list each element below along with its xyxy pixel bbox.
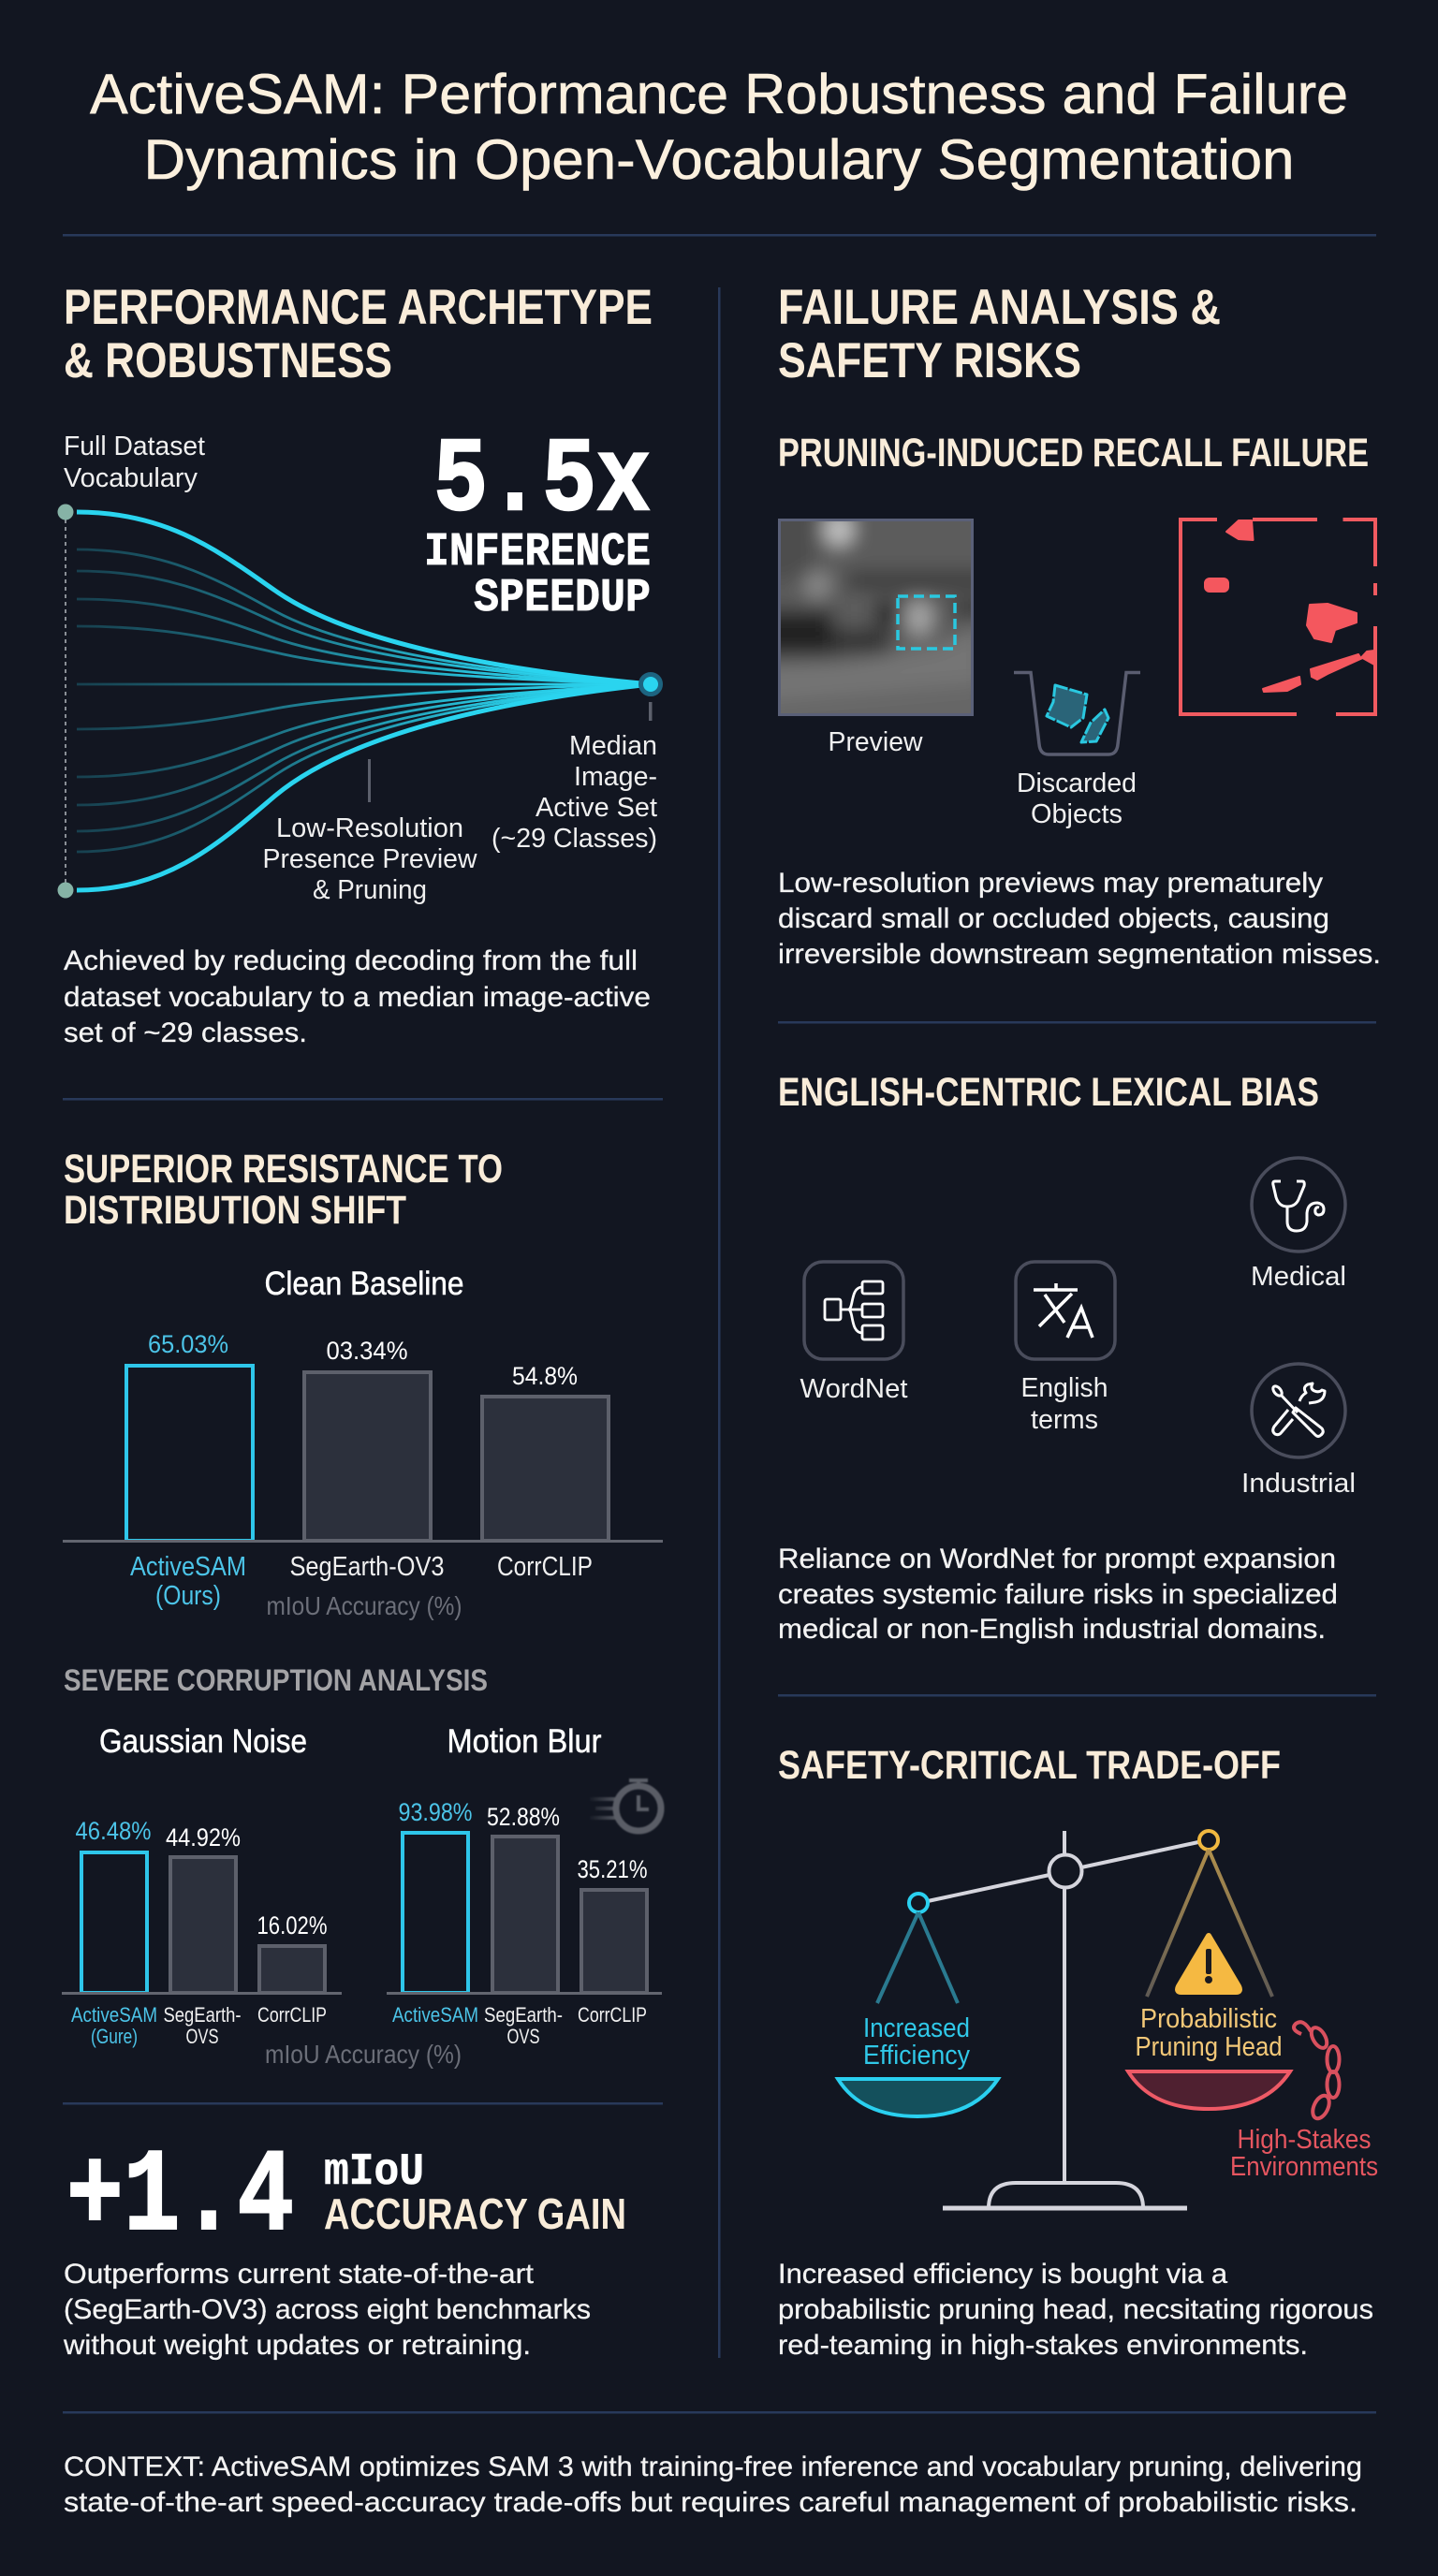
panel: failure analysis and safety risks	[749, 280, 1381, 2361]
label: discarded objects	[1017, 768, 1137, 829]
label: english terms	[1020, 1373, 1108, 1435]
text: speedup explanation: dataset vocabulary to a median image-active	[64, 982, 651, 1013]
footer: context: state-of-the-art speed-accuracy trade-offs but requires careful management of probabilistic risks.	[64, 2487, 1357, 2518]
icon: tools	[1252, 1364, 1345, 1457]
label: low-resolution presence preview: & Pruning	[313, 875, 427, 905]
text: wordnet risk explanation	[778, 1544, 1338, 1645]
diagram: balance scale	[838, 1831, 1290, 2208]
text: trade-off explanation: probabilistic pruning head, necsitating rigorous	[778, 2294, 1373, 2325]
bar chart: motion blur: SegEarth-	[484, 2003, 563, 2027]
heading: severe corruption analysis: SEVERE CORRUPTION ANALYSIS	[64, 1663, 488, 1697]
bar chart: clean baseline: (Ours)	[155, 1581, 221, 1611]
funnel chart: vocabulary reduction	[58, 504, 661, 899]
title: Dynamics in Open-Vocabulary Segmentation	[144, 128, 1294, 191]
label: preview: Preview	[828, 727, 924, 757]
label: full dataset vocabulary: Full Dataset	[64, 432, 205, 461]
label: wordnet: WordNet	[800, 1374, 908, 1404]
heading: performance archetype: & ROBUSTNESS	[64, 333, 392, 388]
label: probabilistic pruning head	[1135, 2004, 1283, 2062]
bar chart: clean baseline: 03.34%	[326, 1337, 408, 1365]
label: english terms: English	[1020, 1373, 1108, 1403]
label: high-stakes environments: Environments	[1230, 2152, 1378, 2182]
icon: wordnet tree	[804, 1262, 903, 1359]
text: preview failure explanation: Low-resolution previews may prematurely	[778, 868, 1323, 899]
bar chart: gaussian noise: (Gure)	[91, 2025, 138, 2048]
label: median image-active set	[492, 731, 657, 854]
stat: +1.4 mIoU accuracy gain: ACCURACY GAIN	[324, 2189, 626, 2238]
heading: superior resistance: SUPERIOR RESISTANCE TO	[64, 1147, 503, 1192]
bar chart: motion blur: OVS	[507, 2025, 539, 2048]
icon: discard bin	[1014, 672, 1140, 754]
text: speedup explanation: Achieved by reducing decoding from the full	[64, 945, 638, 976]
label: median image-active set: Image-	[574, 762, 657, 792]
bar chart: clean baseline: ActiveSAM	[130, 1552, 246, 1582]
bar chart: motion blur: ActiveSAM	[392, 2003, 478, 2027]
text: accuracy gain explanation: (SegEarth-OV3) across eight benchmarks	[64, 2294, 591, 2325]
bar chart: clean baseline: 65.03%	[148, 1330, 228, 1358]
text: wordnet risk explanation: creates systemic failure risks in specialized	[778, 1579, 1338, 1610]
stat: 5.5x inference speedup	[424, 422, 651, 625]
stat: 5.5x inference speedup: INFERENCE	[424, 526, 651, 579]
bar chart: gaussian noise	[62, 1723, 342, 2048]
label: increased efficiency	[863, 2013, 970, 2071]
heading: failure analysis: SAFETY RISKS	[778, 333, 1081, 388]
label: high-stakes environments	[1230, 2125, 1378, 2182]
bar chart: motion blur	[387, 1723, 662, 2048]
panel: distribution shift resistance	[62, 1147, 663, 2069]
footer: context: CONTEXT: ActiveSAM optimizes SAM 3 with training-free inference and vocabulary pruning, delivering	[64, 2452, 1362, 2482]
label: full dataset vocabulary: Vocabulary	[64, 463, 198, 493]
label: increased efficiency: Increased	[863, 2013, 970, 2043]
text: accuracy gain explanation: Outperforms current state-of-the-art	[64, 2259, 535, 2290]
bar chart: gaussian noise: SegEarth-	[163, 2003, 242, 2027]
diagram: segmentation misses	[1181, 520, 1375, 714]
image: blurred preview	[778, 519, 974, 716]
bar chart: motion blur: 35.21%	[577, 1855, 648, 1883]
text: wordnet risk explanation: Reliance on WordNet for prompt expansion	[778, 1544, 1336, 1574]
text: speedup explanation	[64, 945, 651, 1048]
text: trade-off explanation: red-teaming in high-stakes environments.	[778, 2330, 1308, 2361]
icon: stethoscope	[1252, 1158, 1345, 1251]
heading: failure analysis	[778, 280, 1221, 388]
heading: failure analysis: FAILURE ANALYSIS &	[778, 280, 1221, 335]
bar chart: gaussian noise: 46.48%	[75, 1817, 152, 1845]
stat: +1.4 mIoU accuracy gain: mIoU	[324, 2147, 424, 2198]
stat: +1.4 mIoU accuracy gain: +1.4	[66, 2131, 294, 2264]
bar chart: gaussian noise: Gaussian Noise	[99, 1723, 307, 1760]
heading: safety-critical trade-off: SAFETY-CRITICAL TRADE-OFF	[778, 1743, 1281, 1788]
icon: motion stopwatch	[590, 1780, 661, 1831]
stat: 5.5x inference speedup: 5.5x	[433, 422, 651, 541]
text: trade-off explanation: Increased efficiency is bought via a	[778, 2259, 1227, 2290]
label: median image-active set: (~29 Classes)	[492, 824, 657, 854]
heading: superior resistance: DISTRIBUTION SHIFT	[64, 1188, 406, 1233]
bar chart: motion blur: 93.98%	[399, 1798, 472, 1826]
text: accuracy gain explanation	[63, 2259, 591, 2361]
heading: performance archetype: PERFORMANCE ARCHETYPE	[64, 280, 653, 335]
label: median image-active set: Active Set	[536, 793, 657, 823]
bar chart: gaussian noise: ActiveSAM	[71, 2003, 157, 2027]
label: probabilistic pruning head: Pruning Head	[1135, 2032, 1283, 2062]
footer: context	[64, 2452, 1362, 2518]
bar chart: clean baseline: SegEarth-OV3	[290, 1552, 444, 1582]
heading: superior resistance	[64, 1147, 503, 1233]
text: preview failure explanation	[778, 868, 1381, 970]
label: low-resolution presence preview: Presence Preview	[262, 844, 478, 874]
stat: +1.4 mIoU accuracy gain	[66, 2131, 626, 2264]
bar chart: motion blur: Motion Blur	[448, 1723, 602, 1760]
bar chart: clean baseline	[63, 1266, 663, 1620]
icon: translate	[1016, 1262, 1115, 1359]
text: accuracy gain explanation: without weight updates or retraining.	[63, 2330, 531, 2361]
bar chart: gaussian noise: CorrCLIP	[257, 2003, 327, 2027]
axis label: mIoU accuracy: mIoU Accuracy (%)	[265, 2040, 462, 2069]
bar chart: clean baseline: Clean Baseline	[264, 1266, 464, 1302]
heading: performance archetype	[64, 280, 653, 388]
title: ActiveSAM: Performance Robustness and Failure	[90, 63, 1348, 125]
label: high-stakes environments: High-Stakes	[1238, 2125, 1371, 2155]
title	[90, 63, 1348, 191]
label: industrial: Industrial	[1241, 1469, 1356, 1499]
label: discarded objects: Objects	[1031, 799, 1123, 829]
label: english terms: terms	[1031, 1405, 1098, 1435]
label: median image-active set: Median	[569, 731, 657, 761]
bar chart: clean baseline: 54.8%	[512, 1362, 578, 1390]
label: increased efficiency: Efficiency	[863, 2041, 970, 2071]
label: discarded objects: Discarded	[1017, 768, 1137, 798]
bar chart: gaussian noise: OVS	[185, 2025, 219, 2048]
bar chart: clean baseline: mIoU Accuracy (%)	[266, 1591, 462, 1620]
icon: chain	[1294, 2022, 1339, 2121]
icon: warning triangle	[1178, 1936, 1240, 1992]
stat: 5.5x inference speedup: SPEEDUP	[474, 572, 651, 625]
heading: english-centric lexical bias: ENGLISH-CENTRIC LEXICAL BIAS	[778, 1070, 1319, 1115]
text: preview failure explanation: irreversible downstream segmentation misses.	[778, 939, 1381, 970]
text: trade-off explanation	[778, 2259, 1373, 2361]
label: medical: Medical	[1251, 1262, 1346, 1292]
label: low-resolution presence preview	[262, 813, 478, 905]
label: low-resolution presence preview: Low-Resolution	[276, 813, 463, 843]
text: speedup explanation: set of ~29 classes.	[64, 1017, 307, 1048]
bar chart: gaussian noise: 16.02%	[257, 1911, 328, 1939]
text: preview failure explanation: discard small or occluded objects, causing	[778, 903, 1329, 934]
label: full dataset vocabulary	[64, 432, 205, 493]
bar chart: clean baseline: CorrCLIP	[497, 1552, 593, 1582]
text: wordnet risk explanation: medical or non-English industrial domains.	[778, 1614, 1326, 1645]
label: probabilistic pruning head: Probabilistic	[1140, 2004, 1277, 2034]
bar chart: gaussian noise: 44.92%	[166, 1823, 241, 1852]
bar chart: motion blur: CorrCLIP	[578, 2003, 647, 2027]
bar chart: motion blur: 52.88%	[487, 1803, 560, 1831]
panel: performance archetype and robustness	[58, 280, 661, 1048]
